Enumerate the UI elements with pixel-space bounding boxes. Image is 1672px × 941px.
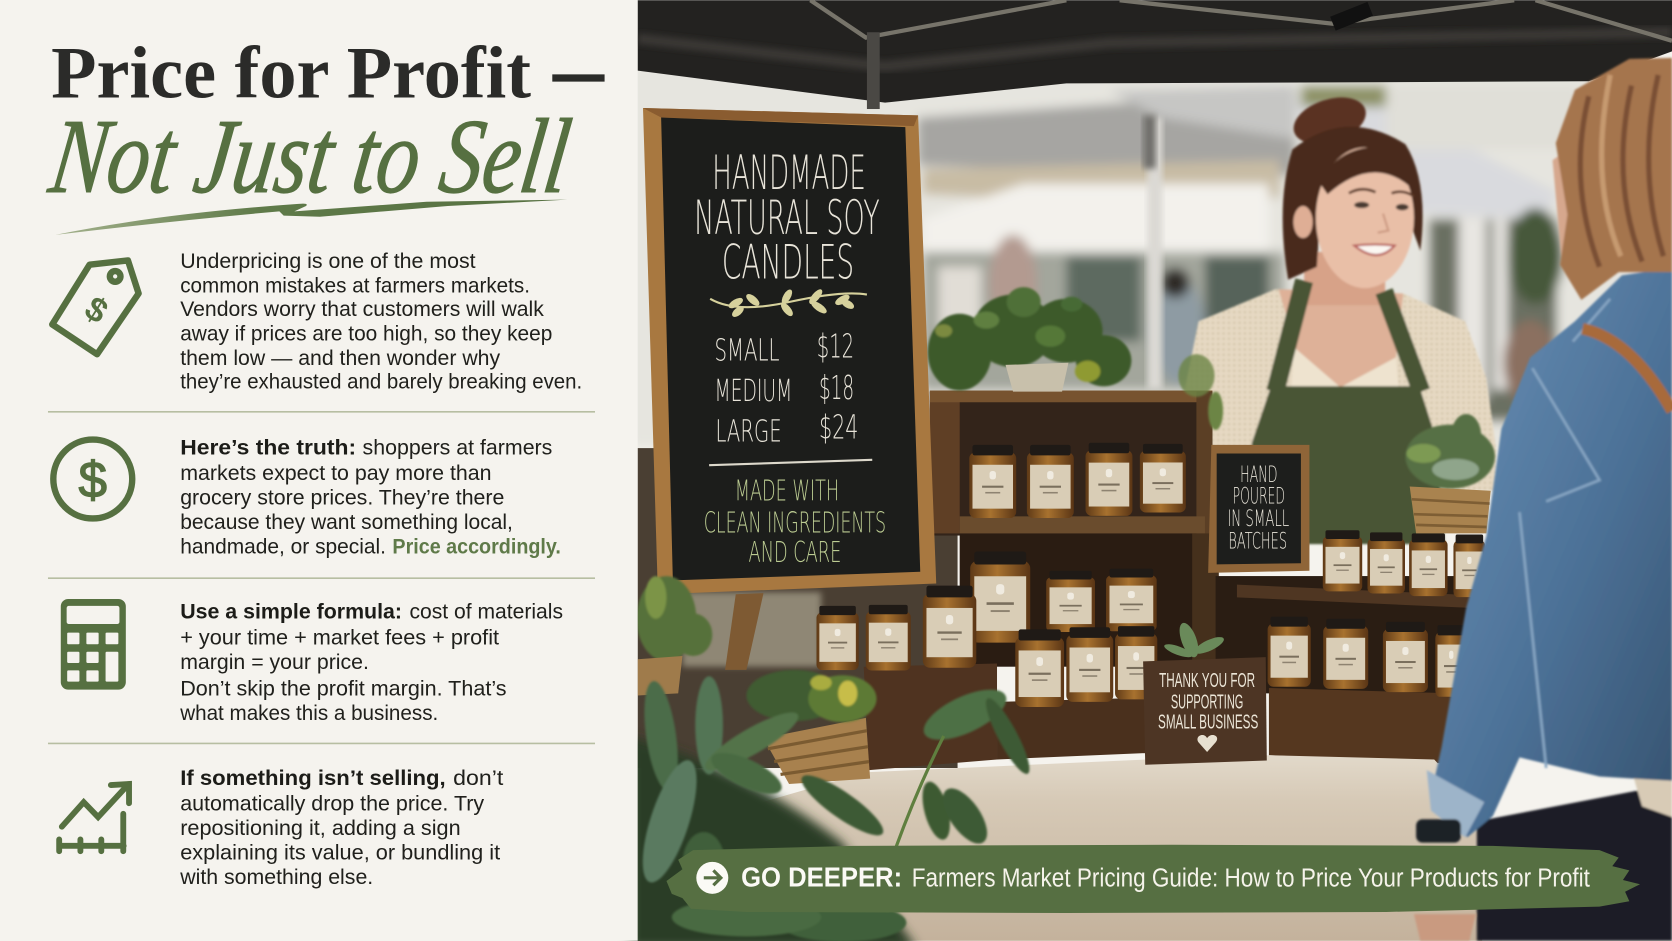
small sign: hand poured: IN SMALL xyxy=(1227,506,1289,532)
sign: thank you: SUPPORTING xyxy=(1171,691,1243,713)
candle jars xyxy=(816,443,1485,707)
text: the truth paragraph: Price accordingly. xyxy=(392,536,561,559)
left plant with basket xyxy=(637,576,712,695)
price list xyxy=(714,326,858,450)
section 2: the truth xyxy=(53,437,561,559)
text: not selling paragraph: repositioning it, adding a sign xyxy=(180,817,461,840)
section 1: underpricing xyxy=(52,250,582,393)
small sign: hand poured: BATCHES xyxy=(1228,528,1287,554)
icon: calculator xyxy=(61,599,126,690)
chalkboard heading: HANDMADE xyxy=(712,146,866,201)
text: not selling paragraph: explaining its value, or bundling it xyxy=(180,842,500,865)
sign: thank you: THANK YOU FOR xyxy=(1159,670,1255,692)
go deeper banner: Farmers Market Pricing Guide: How to Price Your Products for Profit xyxy=(912,864,1590,892)
arrow button xyxy=(696,862,728,894)
chalkboard heading: NATURAL SOY xyxy=(694,191,880,246)
text: not selling paragraph: If something isn’t selling, xyxy=(180,767,446,790)
text: the truth paragraph: handmade, or special. xyxy=(180,536,386,559)
text: the truth paragraph: because they want something local, xyxy=(180,511,513,534)
customer xyxy=(1414,58,1672,941)
sign: thank you xyxy=(1143,657,1267,765)
icon: dollar coin: $ xyxy=(79,451,107,508)
subtitle script: Not Just to Sell xyxy=(43,99,577,216)
tent poles xyxy=(1147,118,1162,389)
panel: text column xyxy=(0,0,638,941)
chalkboard tagline: CLEAN INGREDIENTS xyxy=(704,505,886,539)
background market tents xyxy=(629,64,1672,448)
photo: farmers market booth xyxy=(629,0,1672,941)
price list: $18 xyxy=(819,368,854,407)
section 4: not selling xyxy=(59,767,504,889)
title: Price for Profit xyxy=(51,31,531,114)
text: formula paragraph: Don’t skip the profit margin. That’s xyxy=(180,677,507,700)
text: formula paragraph: Use a simple formula: xyxy=(180,601,402,624)
price list: $24 xyxy=(819,408,858,447)
chalkboard tagline xyxy=(704,473,886,569)
icon: price tag xyxy=(52,260,139,354)
chalkboard tagline: MADE WITH xyxy=(735,473,839,507)
price list: LARGE xyxy=(716,415,782,450)
banner text: GO DEEPER: xyxy=(741,861,902,892)
price list: SMALL xyxy=(714,334,779,369)
icon: price tag: $ xyxy=(78,289,114,331)
brush underline xyxy=(55,200,567,235)
foreground plant xyxy=(629,676,1036,941)
small plant by thank you sign xyxy=(1163,620,1226,660)
potted plant on crate xyxy=(928,287,1131,392)
text: underpricing paragraph: Vendors worry that customers will walk xyxy=(180,298,544,321)
vendor xyxy=(1173,89,1496,544)
text: the truth paragraph: markets expect to pay more than xyxy=(180,462,492,485)
small plant beside vendor xyxy=(1178,354,1223,430)
small sign: hand poured xyxy=(1208,445,1309,573)
text: not selling paragraph: don’t xyxy=(453,767,504,790)
chalkboard heading: CANDLES xyxy=(722,236,854,291)
text: not selling paragraph: automatically drop the price. Try xyxy=(180,793,485,816)
sign: thank you: SMALL BUSINESS xyxy=(1158,712,1258,734)
text: underpricing paragraph: away if prices are too high, so they keep xyxy=(180,322,552,345)
text: underpricing paragraph: Underpricing is one of the most xyxy=(180,250,476,273)
text: the truth paragraph: Here’s the truth: xyxy=(180,437,356,460)
price list: MEDIUM xyxy=(714,374,792,409)
go deeper banner xyxy=(666,845,1640,913)
chalkboard tagline: AND CARE xyxy=(749,535,841,569)
chalkboard sign xyxy=(643,108,936,670)
canopy xyxy=(638,0,1672,109)
text: the truth paragraph: shoppers at farmers xyxy=(363,437,552,460)
text: the truth paragraph xyxy=(180,437,561,559)
small sign: hand poured: POURED xyxy=(1233,484,1285,510)
small sign: hand poured: HAND xyxy=(1240,462,1277,488)
lower booth backdrop xyxy=(638,448,958,768)
text: underpricing paragraph: them low — and then wonder why xyxy=(180,347,501,370)
text: formula paragraph: margin = your price. xyxy=(180,651,369,674)
text: the truth paragraph: grocery store prices. They’re there xyxy=(180,487,504,510)
text: underpricing paragraph: they’re exhausted and barely breaking even. xyxy=(180,370,582,393)
icon: growth chart xyxy=(59,784,129,851)
basket plant right xyxy=(1405,414,1495,533)
text: formula paragraph: cost of materials xyxy=(409,601,563,624)
text: underpricing paragraph: common mistakes at farmers markets. xyxy=(180,274,530,297)
chalkboard heading xyxy=(694,146,880,291)
price list: $12 xyxy=(817,326,854,365)
text: underpricing paragraph xyxy=(180,250,582,393)
crates and shelving xyxy=(864,391,1477,770)
text: not selling paragraph xyxy=(179,767,504,889)
basket plant centre xyxy=(746,670,877,784)
text: formula paragraph: + your time + market fees + profit xyxy=(180,626,499,649)
chalk sprig xyxy=(710,288,867,318)
text: formula paragraph xyxy=(179,601,563,725)
title: — xyxy=(553,30,604,111)
icon: dollar coin xyxy=(53,440,132,518)
section 3: formula xyxy=(61,599,563,725)
text: not selling paragraph: with something else. xyxy=(179,866,373,889)
table cloth xyxy=(762,755,1482,941)
text: formula paragraph: what makes this a business. xyxy=(179,702,438,725)
